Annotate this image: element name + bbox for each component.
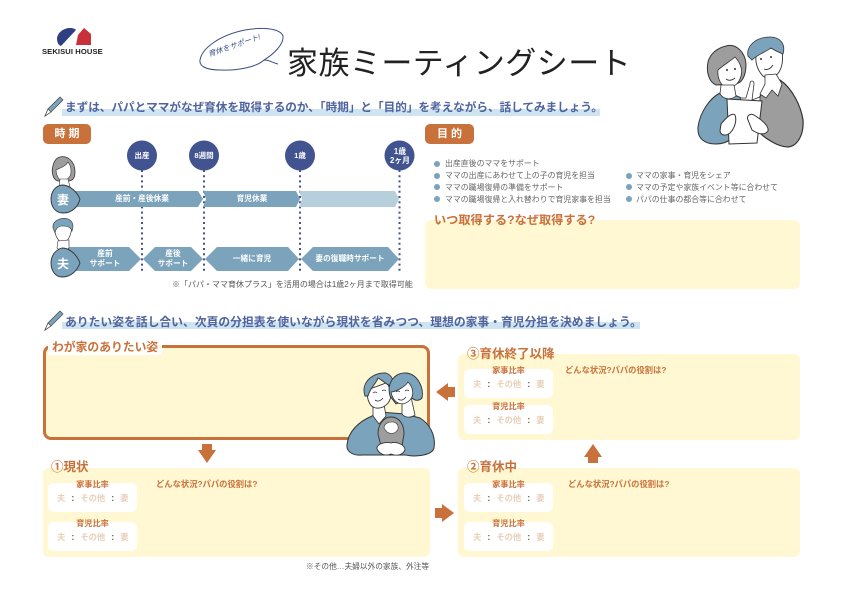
- housework ratio: :: [111, 493, 114, 503]
- panel: 1 current state: [43, 468, 430, 557]
- housework ratio: [464, 483, 553, 512]
- panel: when and why: [425, 220, 800, 289]
- arrow: left to ideal: [436, 383, 455, 401]
- SEKISUI HOUSE logo: SEKISUI HOUSE: [42, 47, 103, 56]
- housework ratio: :: [487, 379, 490, 389]
- childcare ratio: [464, 405, 553, 434]
- section heading 1: [44, 96, 603, 117]
- timeline chart: 1歳: [394, 147, 406, 156]
- purpose list: ママの職場復帰と入れ替わりで育児家事を担当: [445, 195, 611, 204]
- arrow: up to after leave: [584, 444, 602, 463]
- housework ratio: :: [527, 493, 530, 503]
- housework ratio: 夫 その他 妻: [473, 493, 545, 503]
- childcare ratio: 夫 その他 妻: [473, 532, 545, 542]
- childcare ratio: :: [487, 415, 490, 425]
- arrow: right to during leave: [435, 504, 454, 522]
- purpose list: ママの職場復帰の準備をサポート: [445, 183, 563, 192]
- timeline chart: 育児休業: [237, 194, 267, 203]
- panel heading: ①現状: [51, 460, 89, 474]
- housework ratio: 夫 その他 妻: [57, 493, 129, 503]
- housework ratio: 夫 その他 妻: [473, 379, 545, 389]
- childcare ratio: :: [71, 532, 74, 542]
- purpose list: ママの出産にあわせて上の子の育児を担当: [445, 171, 595, 180]
- housework ratio: 家事比率: [76, 480, 109, 489]
- timeline chart: ※「パパ・ママ育休プラス」を活用の場合は1歳2ヶ月まで取得可能: [172, 280, 413, 289]
- timeline chart: 一緒に育児: [233, 254, 271, 263]
- prompt: どんな状況?パパの役割は?: [565, 365, 666, 375]
- section heading 1: まずは、パパとママがなぜ育休を取得するのか、「時期」と「目的」を考えながら、話してみましょう。: [65, 101, 603, 114]
- housework ratio: :: [527, 379, 530, 389]
- panel: ideal family: [43, 345, 430, 440]
- childcare ratio: :: [527, 415, 530, 425]
- purpose list: 出産直後のママをサポート: [445, 159, 540, 168]
- icon: pencil: [44, 96, 64, 117]
- badge: 目的: [425, 124, 474, 144]
- timeline chart: 産前: [97, 249, 113, 258]
- housework ratio: :: [71, 493, 74, 503]
- panel heading: ②育休中: [467, 460, 517, 474]
- timeline chart: サポート: [158, 259, 188, 268]
- childcare ratio: 育児比率: [76, 519, 109, 528]
- timeline chart: サポート: [90, 259, 120, 268]
- illustration: couple reading a sheet: [697, 36, 804, 148]
- speech bubble: 育休をサポート!: [199, 28, 284, 71]
- timeline chart: 8週間: [194, 151, 214, 160]
- timeline chart: 妻: [57, 193, 69, 207]
- housework ratio: [464, 369, 553, 398]
- panel: 2 during leave: [458, 468, 800, 557]
- section heading 2: [44, 310, 642, 331]
- housework ratio: :: [487, 493, 490, 503]
- purpose list: [434, 159, 778, 204]
- purpose list: パパの仕事の都合等に合わせて: [636, 195, 746, 204]
- childcare ratio: 育児比率: [492, 402, 525, 411]
- housework ratio: 家事比率: [492, 366, 525, 375]
- timeline chart: 産前・産後休業: [115, 194, 169, 203]
- section heading 2: ありたい姿を話し合い、次頁の分担表を使いながら現状を省みつつ、理想の家事・育児分担を決めましょう。: [65, 315, 642, 329]
- SEKISUI HOUSE logo: [42, 28, 103, 56]
- illustration: family: [346, 372, 435, 456]
- arrow: down to current state: [198, 444, 216, 463]
- childcare ratio: [464, 522, 553, 551]
- title: 家族ミーティングシート: [287, 46, 631, 81]
- timeline chart: 夫: [57, 257, 69, 271]
- prompt: どんな状況?パパの役割は?: [156, 479, 257, 489]
- childcare ratio: [48, 522, 137, 551]
- icon: pencil: [44, 310, 64, 331]
- timeline chart: 産後: [165, 249, 181, 258]
- childcare ratio: :: [527, 532, 530, 542]
- childcare ratio: :: [111, 532, 114, 542]
- purpose list: ママの家事・育児をシェア: [636, 171, 731, 180]
- badge: 時期: [43, 124, 91, 144]
- panel heading: いつ取得する?なぜ取得する?: [434, 213, 595, 227]
- purpose list: ママの予定や家族イベント等に合わせて: [636, 183, 778, 192]
- badge: 目的: 目 的: [437, 128, 462, 140]
- childcare ratio: :: [487, 532, 490, 542]
- timeline chart: 2ヶ月: [390, 156, 410, 165]
- housework ratio: [48, 483, 137, 512]
- badge: 時期: 時 期: [54, 128, 80, 140]
- prompt: どんな状況?パパの役割は?: [568, 479, 669, 489]
- timeline chart: 1歳: [294, 151, 306, 160]
- timeline chart: 妻の復職時サポート: [315, 254, 385, 263]
- timeline chart: 出産: [134, 151, 150, 160]
- panel heading: わが家のありたい姿: [52, 340, 158, 354]
- timeline chart: [50, 140, 414, 289]
- speech bubble: 育休をサポート!: 育休をサポート!: [207, 32, 261, 59]
- housework ratio: 家事比率: [492, 480, 525, 489]
- panel heading: ③育休終了以降: [467, 347, 555, 361]
- panel: 3 after leave: [458, 354, 800, 440]
- childcare ratio: 夫 その他 妻: [57, 532, 129, 542]
- footnote: ※その他…夫婦以外の家族、外注等: [306, 562, 429, 571]
- childcare ratio: 育児比率: [492, 519, 525, 528]
- childcare ratio: 夫 その他 妻: [473, 415, 545, 425]
